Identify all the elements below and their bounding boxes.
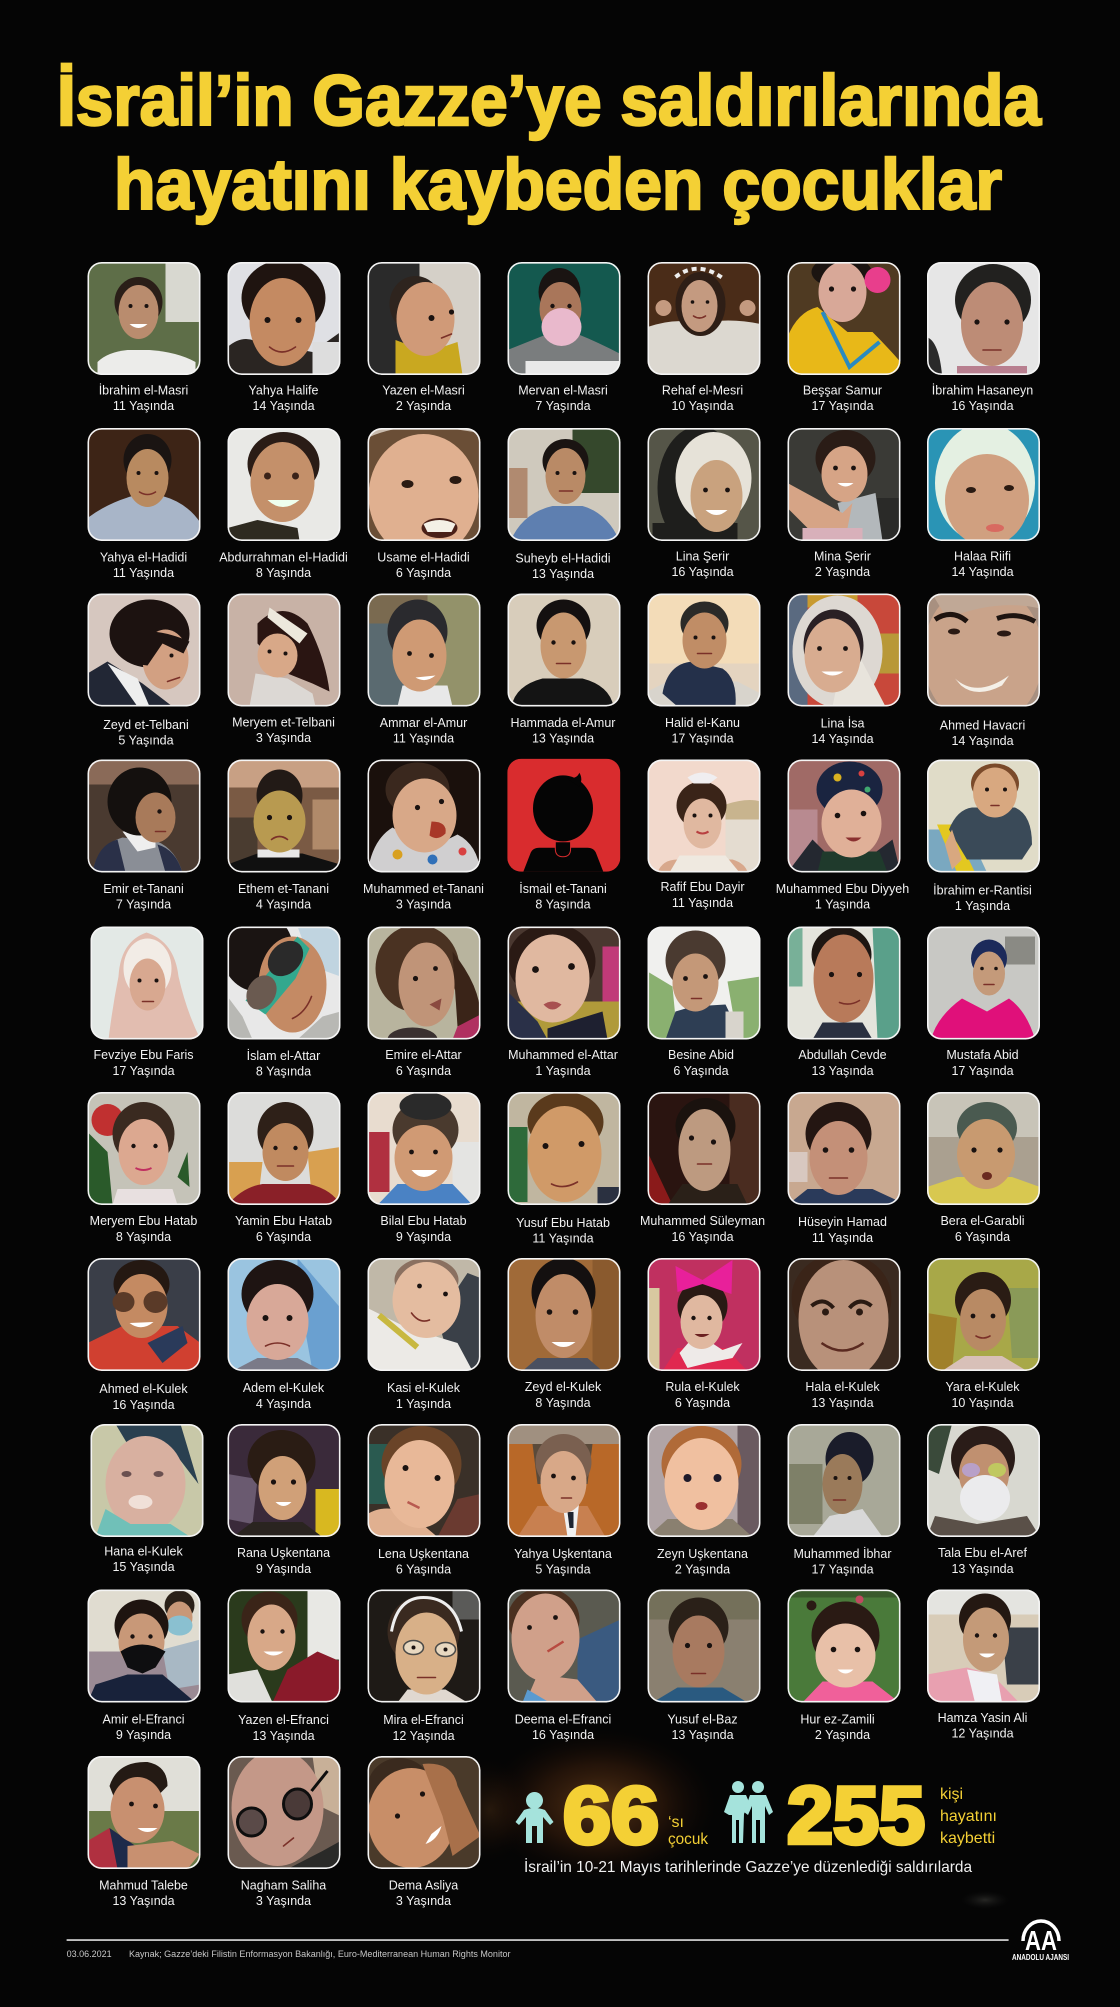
photo (648, 760, 760, 872)
photo (368, 1258, 480, 1371)
card: Nagham Saliha (228, 1750, 340, 1908)
card: Deema el-Efranci (508, 1588, 620, 1742)
footer rule (67, 1939, 1009, 1941)
name and age: Yahya Halife (249, 384, 318, 398)
card: Rana Uşkentana (228, 1424, 340, 1576)
icon: child (516, 1792, 554, 1843)
card: Ammar el-Amur (368, 594, 480, 746)
photo (648, 262, 760, 375)
name and age: 14 Yaşında (951, 734, 1014, 748)
name and age: Mahmud Talebe (99, 1878, 188, 1892)
name and age: Adem el-Kulek (243, 1381, 324, 1395)
name and age: Hana el-Kulek (104, 1544, 183, 1558)
name and age: 6 Yaşında (256, 1230, 311, 1244)
photo (88, 1756, 200, 1869)
name and age: 12 Yaşında (392, 1729, 455, 1743)
photo (788, 428, 900, 541)
card: Hur ez-Zamili (788, 1590, 900, 1742)
logo: Anadolu Ajansı (1012, 1921, 1069, 1962)
photo (788, 1092, 900, 1205)
card: Bera el-Garabli (927, 1092, 1040, 1244)
photo (927, 760, 1040, 872)
card: Beşşar Samur (788, 256, 900, 413)
title: İsrail’in Gazze’ye saldırılarında (57, 62, 1041, 141)
card: Yamin Ebu Hatab (228, 1092, 340, 1244)
name and age: Zeyd el-Kulek (525, 1380, 601, 1394)
card: Muhammed İbhar (788, 1424, 900, 1576)
name and age: 14 Yaşında (951, 565, 1014, 579)
card: Muhammed Ebu Diyyeh (776, 760, 909, 912)
card: Halid el-Kanu (648, 594, 760, 746)
name and age: 3 Yaşında (396, 1894, 451, 1908)
name and age: Muhammed el-Attar (508, 1048, 618, 1062)
name and age: Rehaf el-Mesri (662, 384, 743, 398)
name and age: Zeyd et-Telbani (103, 718, 189, 732)
name and age: Dema Asliya (389, 1878, 458, 1892)
name and age: Mervan el-Masri (518, 384, 608, 398)
card: Hamza Yasin Ali (927, 1590, 1040, 1740)
footer source: Kaynak; Gazze’deki Filistin Enformasyon Bakanlığı, Euro-Mediterranean Human Rights Monitor (129, 1949, 511, 1959)
name and age: 10 Yaşında (951, 1396, 1014, 1410)
photo (788, 926, 900, 1040)
photo (368, 924, 480, 1052)
card: Suheyb el-Hadidi (508, 428, 620, 581)
name and age: Mina Şerir (814, 550, 871, 564)
card: Amir el-Efranci (88, 1590, 200, 1742)
name and age: Lena Uşkentana (378, 1547, 469, 1561)
number 255: 255 (787, 1771, 925, 1861)
photo (88, 594, 200, 706)
card: Fevziye Ebu Faris (90, 926, 204, 1078)
name and age: 6 Yaşında (675, 1396, 730, 1410)
name and age: Yahya el-Hadidi (100, 550, 187, 564)
card: Rula el-Kulek (648, 1258, 760, 1410)
card: Ethem et-Tanani (228, 760, 340, 912)
name and age: 11 Yaşında (672, 896, 733, 910)
label: kişi hayatını kaybetti: kişi (940, 1786, 963, 1803)
card: Yusuf el-Baz (648, 1590, 760, 1742)
photo (368, 1424, 480, 1537)
name and age: Rana Uşkentana (237, 1546, 330, 1560)
name and age: 9 Yaşında (116, 1728, 171, 1742)
name and age: Hüseyin Hamad (798, 1215, 887, 1229)
card: İbrahim er-Rantisi (927, 760, 1040, 913)
card: Mustafa Abid (927, 926, 1040, 1078)
name and age: Ethem et-Tanani (238, 882, 329, 896)
photo (88, 1092, 200, 1205)
photo (228, 428, 340, 541)
name and age: 2 Yaşında (815, 1728, 870, 1742)
name and age: 8 Yaşında (256, 1065, 311, 1079)
name and age: Besine Abid (668, 1048, 734, 1062)
card: Halaa Riifi (927, 423, 1040, 579)
photo (368, 428, 480, 541)
photo: placeholder silhouette (507, 759, 620, 872)
card: Besine Abid (648, 926, 760, 1078)
name and age: Halid el-Kanu (665, 716, 740, 730)
card: Zeyd et-Telbani (88, 594, 200, 748)
photo (88, 262, 200, 375)
name and age: 2 Yaşında (675, 1562, 730, 1576)
name and age: Yazen el-Masri (382, 384, 465, 398)
name and age: Ammar el-Amur (380, 716, 467, 730)
name and age: 13 Yaşında (532, 732, 594, 746)
card: İsmail et-Tanani (placeholder) (507, 759, 620, 912)
name and age: 17 Yaşında (811, 1562, 874, 1576)
photo (222, 912, 340, 1040)
name and age: 3 Yaşında (396, 898, 451, 912)
card: Yahya Halife (228, 260, 340, 413)
photo (648, 926, 760, 1040)
name and age: Muhammed Süleyman (640, 1214, 765, 1228)
title (57, 62, 1041, 225)
footer date: 03.06.2021 (67, 1949, 112, 1959)
name and age: 11 Yaşında (113, 566, 174, 580)
name and age: Hur ez-Zamili (800, 1712, 875, 1726)
photo (927, 926, 1040, 1040)
name and age: Lina Şerir (676, 550, 729, 564)
card: Muhammed el-Attar (508, 924, 620, 1078)
card: Adem el-Kulek (228, 1258, 340, 1411)
card: Zeyd el-Kulek (508, 1258, 620, 1410)
photo (368, 262, 480, 375)
name and age: Zeyn Uşkentana (657, 1547, 748, 1561)
name and age: 3 Yaşında (256, 731, 311, 745)
stat: 66 children (516, 1771, 709, 1861)
name and age: 6 Yaşında (673, 1064, 729, 1078)
name and age: 13 Yaşında (951, 1562, 1014, 1576)
card: Zeyn Uşkentana (648, 1424, 760, 1576)
name and age: Mustafa Abid (946, 1048, 1019, 1062)
card: Hala el-Kulek (788, 1253, 900, 1410)
name and age: Muhammed Ebu Diyyeh (776, 882, 909, 896)
name and age: Muhammed et-Tanani (363, 882, 484, 896)
name and age: Usame el-Hadidi (377, 550, 470, 564)
card: Yazen el-Masri (368, 262, 480, 413)
photo (368, 760, 480, 872)
photo (648, 1424, 760, 1537)
photo (788, 256, 900, 375)
name and age: 13 Yaşında (112, 1894, 175, 1908)
photo (508, 1588, 620, 1702)
photo (648, 1092, 760, 1205)
name and age: 13 Yaşında (671, 1728, 734, 1742)
card: Mervan el-Masri (508, 262, 620, 413)
card: Tala Ebu el-Aref (927, 1424, 1040, 1576)
photo (368, 594, 480, 706)
name and age: 6 Yaşında (955, 1230, 1010, 1244)
card: Meryem et-Telbani (228, 594, 340, 745)
name and age: Hammada el-Amur (511, 716, 615, 730)
name and age: Ahmed el-Kulek (99, 1382, 188, 1396)
name and age: 8 Yaşında (535, 1396, 591, 1410)
photo (90, 1424, 204, 1537)
label: 'sı çocuk: çocuk (668, 1831, 709, 1848)
name and age: 16 Yaşında (671, 1230, 734, 1244)
photo (368, 1756, 480, 1869)
card: Yahya el-Hadidi (88, 428, 200, 580)
photo (648, 1258, 760, 1371)
number 66: 66 (563, 1771, 659, 1861)
name and age: Tala Ebu el-Aref (938, 1546, 1027, 1560)
name and age: 6 Yaşında (396, 1064, 451, 1078)
logo: Anadolu Ajansı: ANADOLU AJANSI (1012, 1952, 1069, 1962)
name and age: 7 Yaşında (116, 898, 171, 912)
name and age: 3 Yaşında (256, 1894, 311, 1908)
card: Meryem Ebu Hatab (88, 1092, 200, 1244)
card: Hana el-Kulek (90, 1424, 204, 1574)
name and age: Beşşar Samur (803, 384, 882, 398)
photo (788, 1590, 900, 1702)
photo (788, 1253, 900, 1380)
photo (788, 1424, 900, 1537)
card: İslam el-Attar (222, 912, 340, 1079)
name and age: Abdullah Cevde (798, 1048, 887, 1062)
photo (927, 262, 1040, 375)
name and age: 16 Yaşında (112, 1398, 175, 1412)
name and age: 13 Yaşında (811, 1396, 874, 1410)
photo (228, 1092, 340, 1205)
card: Bilal Ebu Hatab (368, 1092, 480, 1244)
name and age: 2 Yaşında (815, 565, 870, 579)
photo (228, 760, 340, 872)
photo (508, 1258, 620, 1371)
photo (927, 1590, 1040, 1702)
photo (648, 1590, 760, 1702)
name and age: 13 Yaşında (532, 567, 594, 581)
photo (90, 926, 204, 1040)
name and age: Rafif Ebu Dayir (660, 880, 745, 894)
card: Yahya Uşkentana (508, 1424, 620, 1576)
card: Rehaf el-Mesri (648, 262, 760, 413)
photo (228, 1258, 340, 1371)
card: Rafif Ebu Dayir (648, 760, 760, 910)
name and age: Rula el-Kulek (665, 1380, 740, 1394)
name and age: Yusuf Ebu Hatab (516, 1216, 610, 1230)
card: Emir et-Tanani (88, 760, 200, 912)
icon: two adults (724, 1781, 773, 1843)
name and age: 8 Yaşında (535, 898, 591, 912)
card: Muhammed et-Tanani (363, 760, 484, 912)
title: hayatını kaybeden çocuklar (114, 146, 1002, 225)
card: İbrahim el-Masri (88, 262, 200, 413)
name and age: Ahmed Havacri (940, 718, 1025, 732)
photo (648, 594, 760, 706)
name and age: 2 Yaşında (396, 399, 451, 413)
name and age: 8 Yaşında (256, 566, 311, 580)
name and age: 17 Yaşında (951, 1064, 1014, 1078)
card: Dema Asliya (368, 1756, 480, 1908)
name and age: 5 Yaşında (535, 1562, 591, 1576)
photo (927, 423, 1040, 546)
card: Lina Şerir (648, 426, 760, 579)
name and age: 11 Yaşında (393, 732, 454, 746)
card: Emire el-Attar (368, 924, 480, 1078)
name and age: Nagham Saliha (241, 1878, 326, 1892)
photo (923, 584, 1043, 728)
name and age: Abdurrahman el-Hadidi (219, 550, 348, 564)
name and age: İbrahim Hasaneyn (932, 384, 1033, 398)
name and age: 5 Yaşında (118, 734, 174, 748)
card: Lena Uşkentana (368, 1424, 480, 1576)
photo (648, 426, 760, 550)
name and age: Amir el-Efranci (103, 1712, 184, 1726)
photo (927, 1258, 1040, 1371)
photo (508, 428, 620, 541)
name and age: Bilal Ebu Hatab (380, 1214, 467, 1228)
card: Abdurrahman el-Hadidi (219, 428, 348, 580)
name and age: Emir et-Tanani (103, 882, 184, 896)
photo (368, 1092, 480, 1205)
name and age: Mira el-Efranci (383, 1713, 464, 1727)
photo (788, 594, 900, 708)
name and age: Yahya Uşkentana (514, 1547, 612, 1561)
card: Abdullah Cevde (788, 926, 900, 1078)
name and age: Suheyb el-Hadidi (515, 552, 611, 566)
label: kişi hayatını kaybetti: kaybetti (940, 1830, 995, 1847)
name and age: 7 Yaşında (535, 399, 591, 413)
photo (508, 594, 620, 706)
card: Mina Şerir (788, 428, 900, 579)
name and age: 14 Yaşında (252, 399, 315, 413)
label: kişi hayatını kaybetti: hayatını (940, 1808, 997, 1825)
name and age: Hala el-Kulek (805, 1380, 880, 1394)
logo: Anadolu Ajansı: AA (1025, 1925, 1057, 1956)
name and age: 1 Yaşında (535, 1064, 591, 1078)
photo (368, 1590, 480, 1702)
card: Kasi el-Kulek (368, 1258, 480, 1411)
photo (228, 1590, 340, 1702)
name and age: 6 Yaşında (396, 566, 451, 580)
photo (228, 1424, 340, 1537)
photo (88, 1590, 200, 1702)
name and age: Yazen el-Efranci (238, 1713, 329, 1727)
name and age: 16 Yaşında (671, 565, 734, 579)
photo (508, 1424, 620, 1537)
name and age: Halaa Riifi (954, 550, 1011, 564)
photo (508, 1092, 620, 1205)
name and age: 6 Yaşında (396, 1562, 451, 1576)
photo (508, 262, 620, 375)
stat: 255 people (724, 1771, 997, 1861)
name and age: 17 Yaşında (811, 399, 874, 413)
name and age: İbrahim el-Masri (99, 384, 188, 398)
card: Mahmud Talebe (88, 1756, 200, 1908)
photo (788, 760, 900, 872)
name and age: 15 Yaşında (112, 1560, 175, 1574)
name and age: 13 Yaşında (811, 1064, 874, 1078)
name and age: 13 Yaşında (252, 1729, 315, 1743)
name and age: Hamza Yasin Ali (938, 1711, 1027, 1725)
name and age: 4 Yaşında (256, 898, 311, 912)
name and age: Yara el-Kulek (945, 1380, 1020, 1394)
name and age: Meryem Ebu Hatab (90, 1214, 197, 1228)
name and age: Emire el-Attar (385, 1048, 462, 1062)
name and age: 12 Yaşında (951, 1726, 1014, 1740)
name and age: 17 Yaşında (112, 1064, 175, 1078)
name and age: Meryem et-Telbani (232, 716, 335, 730)
photo (88, 1258, 200, 1371)
card: Yusuf Ebu Hatab (508, 1092, 620, 1246)
photo (88, 760, 200, 872)
name and age: 16 Yaşında (951, 399, 1014, 413)
photo (88, 428, 200, 541)
photo (228, 260, 340, 375)
name and age: Muhammed İbhar (794, 1547, 891, 1561)
name and age: Bera el-Garabli (940, 1214, 1025, 1228)
name and age: Yusuf el-Baz (667, 1712, 738, 1726)
name and age: 14 Yaşında (811, 732, 874, 746)
name and age: İsmail et-Tanani (519, 882, 607, 896)
name and age: 1 Yaşında (815, 898, 870, 912)
photo (927, 1424, 1040, 1537)
name and age: 1 Yaşında (955, 899, 1010, 913)
card: Ahmed Havacri (923, 584, 1043, 748)
card: Ahmed el-Kulek (88, 1258, 200, 1412)
name and age: Fevziye Ebu Faris (93, 1048, 194, 1062)
name and age: Deema el-Efranci (515, 1712, 611, 1726)
name and age: 8 Yaşında (116, 1230, 171, 1244)
photo (228, 594, 340, 706)
card: Muhammed Süleyman (640, 1092, 765, 1244)
card: Usame el-Hadidi (368, 427, 480, 580)
name and age: 9 Yaşında (396, 1230, 451, 1244)
name and age: Yamin Ebu Hatab (235, 1214, 332, 1228)
name and age: 11 Yaşında (113, 399, 174, 413)
card: Lina İsa (788, 594, 900, 746)
name and age: 4 Yaşında (256, 1397, 311, 1411)
photo (228, 1750, 340, 1869)
card: Hammada el-Amur (508, 594, 620, 746)
name and age: 11 Yaşında (812, 1231, 873, 1245)
card: İbrahim Hasaneyn (927, 262, 1040, 413)
name and age: 17 Yaşında (671, 732, 734, 746)
name and age: İbrahim er-Rantisi (933, 884, 1032, 898)
name and age: Lina İsa (821, 716, 864, 730)
name and age: 1 Yaşında (396, 1397, 451, 1411)
card: Hüseyin Hamad (788, 1092, 900, 1245)
name and age: 16 Yaşında (532, 1728, 594, 1742)
card: Yazen el-Efranci (228, 1590, 340, 1743)
photo (927, 1092, 1040, 1205)
name and age: 9 Yaşında (256, 1562, 311, 1576)
name and age: 11 Yaşında (532, 1232, 594, 1246)
label: 'sı çocuk: ‘sı (668, 1814, 684, 1831)
name and age: 10 Yaşında (671, 399, 734, 413)
name and age: Kasi el-Kulek (387, 1381, 460, 1395)
card: Mira el-Efranci (368, 1590, 480, 1743)
card: Yara el-Kulek (927, 1258, 1040, 1410)
stat caption: İsrail’in 10-21 Mayıs tarihlerinde Gazze’ye düzenlediği saldırılarda (524, 1857, 972, 1876)
name and age: İslam el-Attar (247, 1049, 320, 1063)
photo (508, 924, 620, 1040)
